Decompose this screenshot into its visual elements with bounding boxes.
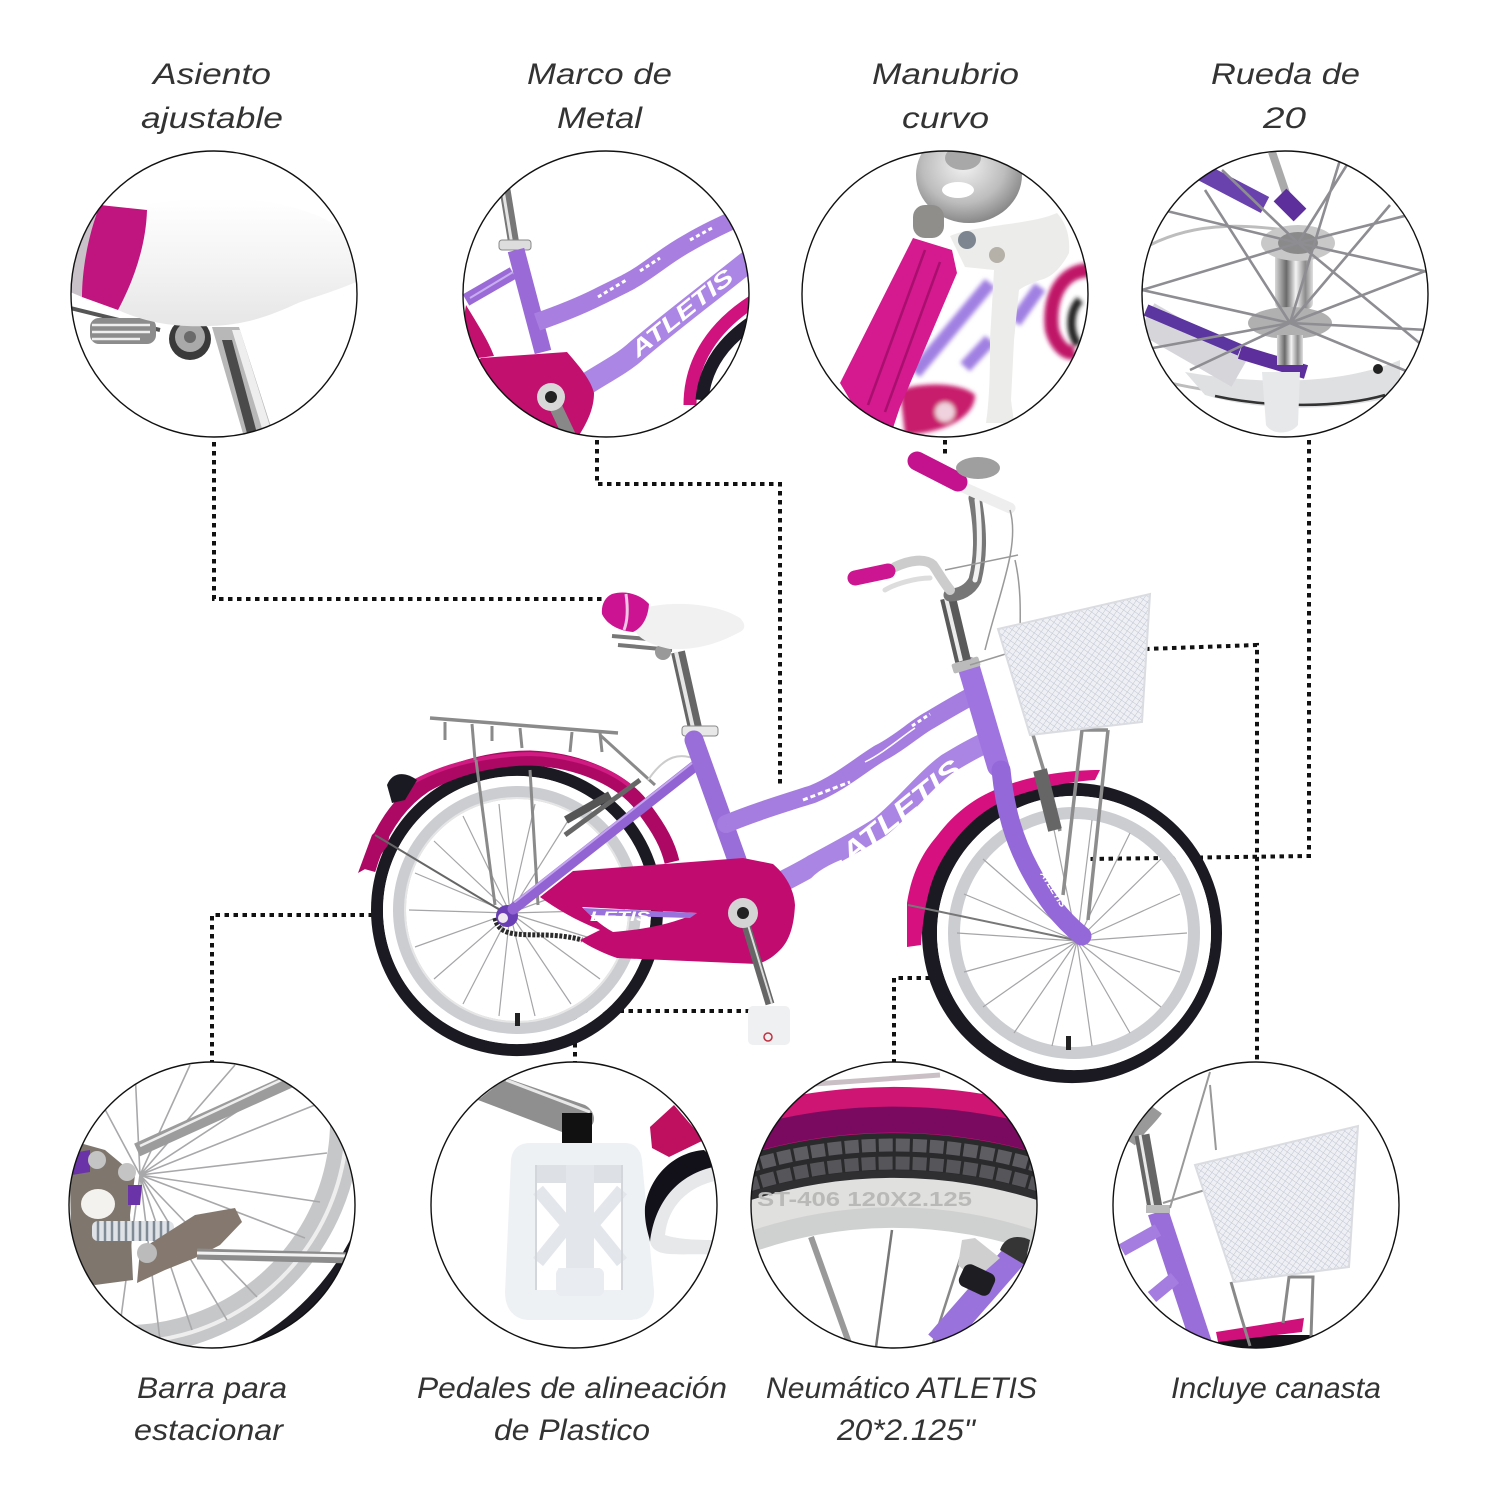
- chain stay: [137, 1080, 292, 1150]
- seat clamp and spring: [70, 308, 211, 360]
- white saddle: [118, 245, 356, 326]
- brake cables: [945, 510, 1020, 665]
- rear fender: [690, 300, 755, 405]
- panel: tire detail: [745, 1062, 1043, 1350]
- frame: [1130, 1110, 1157, 1142]
- spokes: [1142, 160, 1428, 380]
- crank and pedal: [728, 898, 790, 1045]
- caption: Neumático ATLETIS: [766, 1372, 1037, 1447]
- panel: parking stand detail: [68, 1061, 356, 1349]
- saddle of main bicycle: [602, 592, 744, 660]
- stand plate: [137, 1208, 242, 1283]
- caption: Barra para estacionar: [134, 1372, 287, 1447]
- pink grip: [840, 238, 957, 437]
- main bicycle illustration: [358, 457, 1222, 1083]
- panel: basket detail: [1113, 1062, 1399, 1350]
- frame flourishes: [803, 714, 930, 888]
- caption: Barra para estacionar: estacionar: [134, 1414, 284, 1447]
- logo on down tube: ATLETIS: [834, 753, 967, 869]
- frame logo ATLETIS: ATLETIS: [624, 264, 739, 363]
- panel: seat detail: [70, 151, 360, 437]
- dropout plate: [69, 1140, 135, 1285]
- heading: Asiento ajustable: ajustable: [141, 102, 283, 135]
- fork logo: ATLETIS: [1037, 869, 1068, 910]
- rear wheel: [371, 764, 663, 1056]
- caption: Pedales de alineación de Plastico: de Plastico: [494, 1414, 650, 1447]
- caption: Incluye canasta: Incluye canasta: [1171, 1372, 1381, 1405]
- stand bar: [197, 1254, 350, 1258]
- front fender: [907, 770, 1100, 947]
- brake: [957, 1237, 1030, 1298]
- rear fender: [358, 754, 672, 873]
- stem collar: [951, 656, 981, 674]
- cables: [1163, 1072, 1216, 1208]
- sidewall text: ST-406 120X2.125: [757, 1189, 972, 1211]
- heading: Asiento ajustable: Asiento: [151, 58, 271, 91]
- panel: plastic pedal detail: [431, 1062, 725, 1348]
- fender and tire: [1218, 1335, 1318, 1350]
- heading: Rueda de 20: [1211, 58, 1360, 135]
- heading: Marco de Metal: Marco de: [527, 58, 672, 91]
- basket: [998, 594, 1150, 735]
- chain guard: [480, 352, 594, 434]
- seat post: [676, 652, 718, 736]
- pink fender: [650, 1105, 704, 1157]
- chain guard: [540, 858, 795, 964]
- crank arm: [478, 1078, 594, 1132]
- sidewall and rim: [745, 1178, 1043, 1350]
- spring: [92, 1221, 174, 1241]
- tire: [644, 1150, 712, 1242]
- heading: Manubrio curvo: Manubrio: [872, 58, 1019, 91]
- pink saddle band: [82, 205, 147, 310]
- taillight: [387, 774, 417, 803]
- front brake: [1040, 770, 1055, 830]
- panel: wheel hub detail: [1142, 151, 1430, 437]
- front wheel: [922, 783, 1222, 1083]
- frame tubes: [513, 668, 1082, 936]
- crank: [537, 383, 570, 437]
- heading: Marco de Metal: Metal: [557, 102, 644, 135]
- caption: Neumático ATLETIS: 20*2.125": [836, 1414, 976, 1447]
- purple fork pieces: [1198, 170, 1265, 205]
- basket stays: [1231, 1277, 1313, 1346]
- caption: Neumático ATLETIS: Neumático ATLETIS: [766, 1372, 1037, 1405]
- heading: Rueda de 20: 20: [1262, 102, 1306, 135]
- stem: [948, 598, 963, 661]
- bell: [956, 457, 1000, 479]
- rear rack: [375, 718, 698, 910]
- tire and rim: [135, 1126, 352, 1346]
- rim: [1185, 360, 1400, 408]
- panel: curved handlebar detail: [802, 127, 1090, 437]
- hub: [1248, 225, 1335, 432]
- caption: Pedales de alineación de Plastico: [417, 1372, 727, 1447]
- bell: [913, 152, 1022, 238]
- caption: Barra para estacionar: Barra para: [137, 1372, 287, 1405]
- brake lever bracket: [950, 213, 1069, 423]
- dotted connector lines: [212, 440, 1309, 1062]
- fender: [762, 1072, 1026, 1150]
- tire tread: [752, 1133, 1036, 1200]
- seat post: [212, 327, 273, 437]
- heading: Manubrio curvo: [872, 58, 1019, 135]
- heading: Manubrio curvo: curvo: [902, 102, 989, 135]
- chain and rear brake: [495, 795, 610, 940]
- heading: Rueda de 20: Rueda de: [1211, 58, 1360, 91]
- heading: Marco de Metal: [527, 58, 672, 135]
- white nut: [81, 1189, 115, 1219]
- pedal body: [505, 1143, 654, 1320]
- caption: Pedales de alineación de Plastico: Pedales de alineación: [417, 1372, 727, 1405]
- heading: Asiento ajustable: [141, 58, 283, 135]
- panel: metal frame detail: [462, 151, 755, 440]
- basket: [1195, 1126, 1358, 1282]
- spokes: [100, 1065, 327, 1340]
- chain guard: LETIS: [590, 908, 651, 924]
- handlebars: [855, 461, 1010, 595]
- spokes and fork: [811, 1230, 1015, 1347]
- basket stays: [1033, 730, 1108, 920]
